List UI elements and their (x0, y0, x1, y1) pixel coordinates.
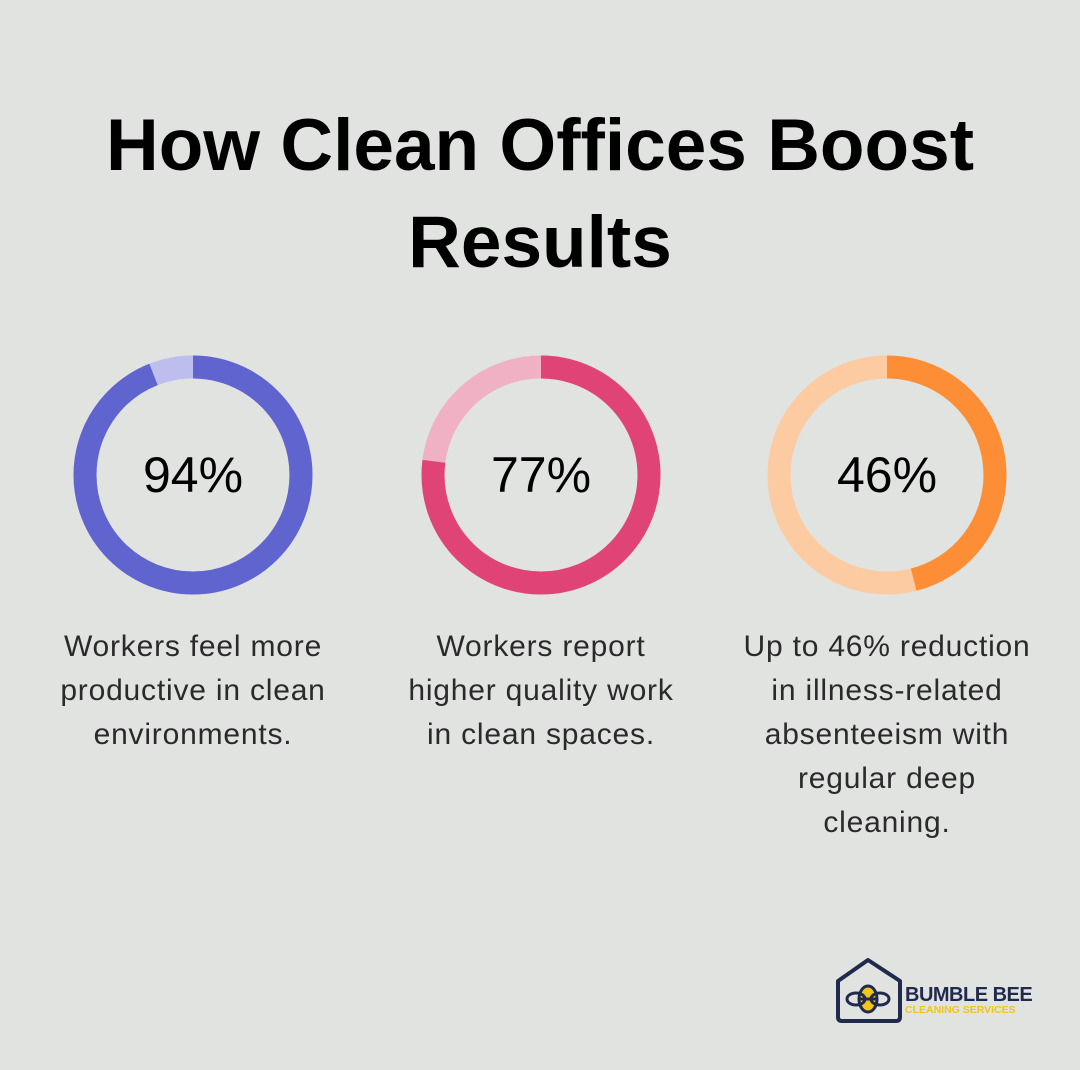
donut chart: 77% (422, 356, 660, 594)
logo (836, 958, 1032, 1023)
title: Results (408, 202, 672, 283)
panel: 94% (60, 356, 326, 751)
caption: Workers report higher quality work in clean spaces. (408, 630, 674, 751)
title (106, 105, 974, 283)
panel: 77% (408, 356, 674, 751)
icon: bee house (836, 958, 902, 1023)
logo: CLEANING SERVICES (905, 1004, 1016, 1016)
panel: 46% (743, 356, 1031, 839)
caption: Up to 46% reduction in illness-related absenteeism with regular deep cleaning. (743, 630, 1031, 839)
caption: Workers feel more productive in clean environments. (60, 630, 326, 751)
value: 77% (491, 447, 591, 503)
value: 46% (837, 447, 937, 503)
donut chart: 46% (768, 356, 1006, 594)
donut chart: 94% (74, 356, 312, 594)
brand text: BUMBLE BEE (905, 984, 1032, 1006)
value: 94% (143, 447, 243, 503)
title: How Clean Offices Boost (106, 105, 974, 186)
